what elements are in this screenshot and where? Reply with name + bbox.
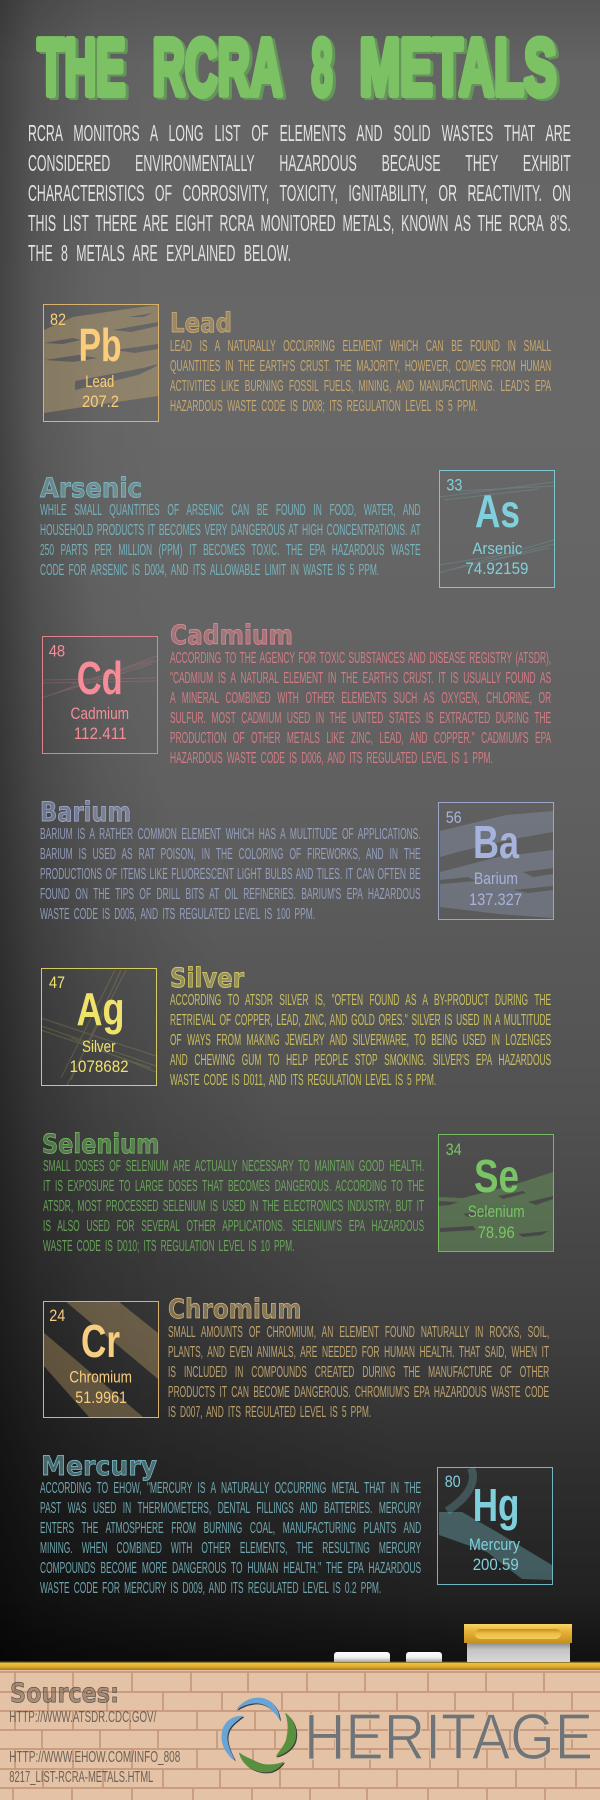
body text: silver: AND CHEWING GUM TO HELP PEOPLE STOP SMOKING. SILVER'S EPA HAZARDOUS	[170, 1052, 551, 1069]
element tile: Pb: Lead	[85, 373, 114, 391]
body text: barium: PRODUCTIONS OF ITEMS LIKE FLUORESCENT LIGHT BULBS AND TILES. IT CAN OFTEN BE	[40, 866, 421, 883]
element tile: As: 33	[446, 477, 462, 495]
body text: cadmium: "CADMIUM IS A NATURAL ELEMENT IN THE EARTH'S CRUST. IT IS USUALLY FOUND AS	[170, 670, 551, 686]
element tile: Ag	[41, 968, 157, 1086]
source links	[9, 1709, 180, 1786]
element tile: Se: Selenium	[468, 1203, 525, 1221]
body text: silver: OF WAYS FROM MAKING JEWELRY AND SILVERWARE, TO BEING USED IN LOZENGES	[170, 1032, 551, 1049]
element tile: Ba: Barium	[474, 870, 518, 888]
element tile: Cd: 112.411	[74, 725, 127, 743]
panel: lead	[43, 304, 551, 422]
chalk ledge	[0, 1661, 600, 1670]
element tile: Cd	[42, 636, 158, 754]
body text: mercury: COMPOUNDS BECOME MORE DANGEROUS TO HUMAN HEALTH." THE EPA HAZARDOUS	[40, 1560, 421, 1576]
element tile: Cr	[43, 1301, 159, 1418]
icon: heritage logo arrows	[221, 1698, 298, 1774]
title: THE	[38, 22, 126, 112]
body text: silver	[170, 992, 551, 1089]
eraser handle	[464, 1624, 572, 1643]
body text: lead: LEAD IS A NATURALLY OCCURRING ELEMENT WHICH CAN BE FOUND IN SMALL	[170, 338, 551, 354]
element tile: Se: 78.96	[478, 1224, 515, 1242]
body text: selenium: ATSDR, MOST PROCESSED SELENIUM IS USED IN THE ELECTRONICS INDUSTRY, BUT IT	[42, 1198, 424, 1215]
body text: selenium: IT IS EXPOSURE TO LARGE DOSES THAT BECOMES DANGEROUS. ACCORDING TO THE	[42, 1178, 424, 1195]
element tile: Ba	[438, 802, 554, 920]
element tile: Se	[438, 1134, 554, 1252]
body text: barium: FOUND ON THE TIPS OF DRILL BITS AT OIL REFINERIES. BARIUM'S EPA HAZARDOUS	[40, 886, 421, 903]
heading: Barium: Barium	[40, 797, 131, 828]
title	[36, 22, 560, 114]
eraser grip	[475, 1629, 561, 1639]
body text: barium: BARIUM IS USED AS RAT POISON, IN THE COLORING OF FIREWORKS, AND IN THE	[40, 846, 421, 863]
body text: arsenic: WHILE SMALL QUANTITIES OF ARSENIC CAN BE FOUND IN FOOD, WATER, AND	[40, 502, 421, 519]
chalk stick short	[406, 1652, 442, 1662]
panel: barium	[40, 797, 554, 923]
element tile: Cd: Cadmium	[71, 705, 129, 723]
body text: barium	[40, 826, 421, 923]
source links: HTTP://WWW.EHOW.COM/INFO_808	[9, 1749, 180, 1766]
body text: lead	[170, 338, 551, 414]
body text: chromium: IS D007, AND ITS REGULATED LEVEL IS 5 PPM.	[168, 1404, 371, 1420]
element tile: Cr: 24	[49, 1307, 65, 1325]
element tile: Pb: Pb	[78, 319, 121, 371]
heading: Silver: Silver	[170, 963, 245, 994]
sources heading: Sources:	[10, 1678, 119, 1709]
element tile: Se: 34	[446, 1141, 462, 1159]
intro text: CONSIDERED ENVIRONMENTALLY HAZARDOUS BECAUSE THEY EXHIBIT	[28, 150, 571, 176]
element tile: Hg: Hg	[473, 1479, 519, 1531]
element tile: Cr: 51.9961	[75, 1389, 127, 1407]
title: RCRA	[156, 24, 286, 114]
body text: mercury	[40, 1480, 421, 1596]
body text: selenium: IS ALSO USED FOR SEVERAL OTHER APPLICATIONS. SELENIUM'S EPA HAZARDOUS	[42, 1218, 424, 1235]
body text: chromium	[168, 1324, 549, 1420]
element tile: Ag: 47	[49, 974, 65, 992]
intro text: RCRA MONITORS A LONG LIST OF ELEMENTS AND SOLID WASTES THAT ARE	[28, 120, 571, 146]
title: 8	[314, 24, 336, 114]
element tile: Pb: 82	[50, 311, 66, 329]
element tile: Ag: 1078682	[70, 1058, 129, 1076]
heading: Arsenic: Arsenic	[40, 473, 142, 504]
body text: mercury: ENTERS THE ATMOSPHERE FROM BURNING COAL, MANUFACTURING PLANTS AND	[40, 1520, 421, 1536]
panel: chromium	[43, 1294, 549, 1420]
body text: chromium: SMALL AMOUNTS OF CHROMIUM, AN ELEMENT FOUND NATURALLY IN ROCKS, SOIL,	[168, 1324, 549, 1340]
body text: selenium: SMALL DOSES OF SELENIUM ARE ACTUALLY NECESSARY TO MAINTAIN GOOD HEALTH.	[42, 1158, 424, 1175]
body text: arsenic: CODE FOR ARSENIC IS D004, AND ITS ALLOWABLE LIMIT IN WASTE IS 5 PPM.	[40, 562, 379, 579]
intro text	[28, 120, 571, 266]
title: 8	[312, 22, 332, 112]
body text: cadmium: SULFUR. MOST CADMIUM USED IN THE UNITED STATES IS EXTRACTED DURING THE	[170, 710, 551, 726]
eraser	[464, 1624, 572, 1662]
body text: cadmium: A MINERAL COMBINED WITH OTHER ELEMENTS SUCH AS OXYGEN, CHLORINE, OR	[170, 690, 551, 706]
element tile: Ag: Silver	[82, 1038, 116, 1056]
element tile: Cr: Cr	[81, 1315, 120, 1367]
element tile: Cr: Chromium	[69, 1369, 132, 1387]
title: THE	[40, 24, 128, 114]
element tile: Cd: 48	[49, 643, 65, 661]
body text: arsenic	[40, 502, 421, 579]
body text: arsenic: HOUSEHOLD PRODUCTS IT BECOMES VERY DANGEROUS AT HIGH CONCENTRATIONS. AT	[40, 522, 421, 539]
body text: cadmium: ACCORDING TO THE AGENCY FOR TOXIC SUBSTANCES AND DISEASE REGISTRY (ATSDR),	[170, 650, 551, 666]
panel: arsenic	[40, 470, 555, 588]
element tile: Ba: 137.327	[469, 891, 522, 909]
body text: barium: BARIUM IS A RATHER COMMON ELEMENT WHICH HAS A MULTITUDE OF APPLICATIONS.	[40, 826, 421, 843]
panel: selenium	[42, 1129, 554, 1255]
element tile: Ba: 56	[446, 809, 462, 827]
element tile: Ag: Ag	[76, 983, 124, 1035]
body text: barium: WASTE CODE IS D005, AND ITS REGULATED LEVEL IS 100 PPM.	[40, 906, 315, 923]
heading: Chromium: Chromium	[168, 1294, 301, 1325]
body text: mercury: ACCORDING TO EHOW, "MERCURY IS A NATURALLY OCCURRING METAL THAT IN THE	[40, 1480, 421, 1496]
heading: Lead: Lead	[170, 308, 232, 339]
body text: chromium: IS INCLUDED IN COMPOUNDS CREATED DURING THE MANUFACTURE OF OTHER	[168, 1364, 549, 1380]
body text: chromium: PRODUCTS IT CAN BECOME DANGEROUS. CHROMIUM'S EPA HAZARDOUS WASTE CODE	[168, 1384, 549, 1400]
heading: Selenium: Selenium	[42, 1129, 160, 1160]
element tile: As: 74.92159	[465, 560, 528, 578]
body text: silver: RETRIEVAL OF COPPER, LEAD, ZINC, AND GOLD ORES." SILVER IS USED IN A MULTITUDE	[170, 1012, 551, 1029]
brick wall	[0, 1670, 600, 1800]
element tile: As: Arsenic	[472, 540, 522, 558]
chalk stick long	[334, 1652, 390, 1662]
eraser felt	[467, 1643, 570, 1662]
title: RCRA	[152, 22, 282, 112]
intro text: CHARACTERISTICS OF CORROSIVITY, TOXICITY, IGNITABILITY, OR REACTIVITY. ON	[28, 180, 571, 206]
intro text: THIS LIST THERE ARE EIGHT RCRA MONITORED METALS, KNOWN AS THE RCRA 8'S.	[28, 210, 571, 236]
body text: chromium: PLANTS, AND EVEN ANIMALS, ARE NEEDED FOR HUMAN HEALTH. THAT SAID, WHEN IT	[168, 1344, 549, 1360]
element tile: Pb	[43, 304, 159, 422]
panel: cadmium	[42, 620, 551, 766]
body text: cadmium: HAZARDOUS WASTE CODE IS D006, AND ITS REGULATED LEVEL IS 1 PPM.	[170, 750, 493, 766]
body text: silver: WASTE CODE IS D011, AND ITS REGULATION LEVEL IS 5 PPM.	[170, 1072, 436, 1089]
element tile: Hg: 200.59	[473, 1556, 519, 1574]
body text: mercury: PAST WAS USED IN THERMOMETERS, DENTAL FILLINGS AND BATTERIES. MERCURY	[40, 1500, 421, 1516]
body text: cadmium	[170, 650, 551, 766]
body text: mercury: MINING. WHEN COMBINED WITH OTHER ELEMENTS, THE RESULTING MERCURY	[40, 1540, 421, 1556]
source links: HTTP://WWW.ATSDR.CDC.GOV/	[9, 1709, 157, 1726]
body text: selenium	[42, 1158, 424, 1255]
intro text: THE 8 METALS ARE EXPLAINED BELOW.	[28, 240, 291, 266]
body text: lead: QUANTITIES IN THE EARTH'S CRUST. THE MAJORITY, HOWEVER, COMES FROM HUMAN	[170, 358, 551, 374]
body text: cadmium: PRODUCTION OF OTHER METALS LIKE ZINC, LEAD, AND COPPER." CADMIUM'S EPA	[170, 730, 551, 746]
element tile: As	[439, 470, 555, 588]
body text: silver: ACCORDING TO ATSDR SILVER IS, "OFTEN FOUND AS A BY-PRODUCT DURING THE	[170, 992, 551, 1009]
body text: selenium: WASTE CODE IS D010; ITS REGULATION LEVEL IS 10 PPM.	[42, 1238, 294, 1255]
heading: Mercury: Mercury	[41, 1451, 157, 1482]
body text: lead: HAZARDOUS WASTE CODE IS D008; ITS REGULATION LEVEL IS 5 PPM.	[170, 398, 478, 414]
source links: 8217_LIST-RCRA-METALS.HTML	[9, 1769, 153, 1786]
element tile: As: As	[475, 485, 520, 537]
element tile: Hg	[437, 1466, 553, 1585]
body text: arsenic: 250 PARTS PER MILLION (PPM) IT BECOMES TOXIC. THE EPA HAZARDOUS WASTE	[40, 542, 421, 559]
element tile: Cd: Cd	[77, 652, 123, 704]
element tile: Pb: 207.2	[82, 393, 119, 411]
element tile: Hg: Mercury	[469, 1536, 521, 1554]
element tile: Hg: 80	[445, 1473, 461, 1491]
panel: mercury	[40, 1451, 553, 1596]
element tile: Ba: Ba	[473, 816, 519, 868]
body text: lead: ACTIVITIES LIKE BURNING FOSSIL FUELS, MINING, AND MANUFACTURING. LEAD'S EPA	[170, 378, 551, 394]
panel: silver	[41, 963, 551, 1089]
heading: Cadmium: Cadmium	[170, 620, 293, 651]
body text: mercury: WASTE CODE FOR MERCURY IS D009, AND ITS REGULATED LEVEL IS 0.2 PPM.	[40, 1580, 381, 1596]
element tile: Se: Se	[474, 1150, 519, 1202]
